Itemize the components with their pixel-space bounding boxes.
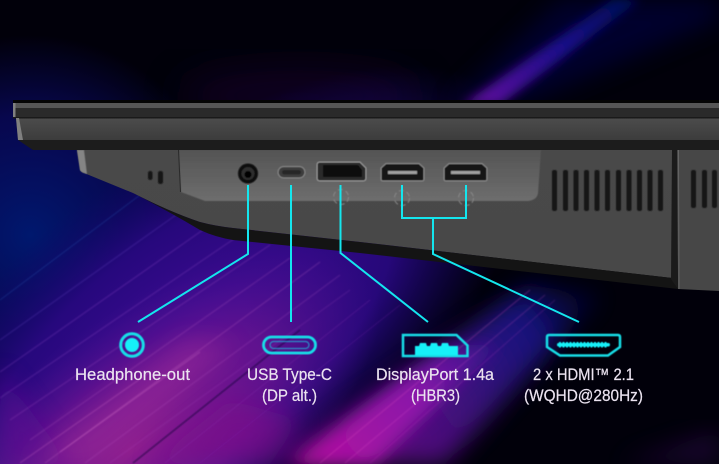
label: HDMI: (WQHD@280Hz) [524, 387, 643, 405]
line: headphone [138, 185, 248, 322]
bezel shadow band [18, 140, 719, 150]
label: USB Type-C [247, 366, 332, 405]
speaker slots [148, 171, 163, 184]
icon: HDMI [547, 335, 620, 356]
label: DisplayPort 1.4a: DisplayPort 1.4a [376, 366, 495, 384]
port panel left edge [178, 150, 180, 192]
label: DisplayPort 1.4a [376, 366, 495, 405]
ventilation slots [552, 170, 717, 211]
port panel [179, 150, 541, 201]
port: USB-C [278, 166, 305, 178]
line: HDMI bracket [402, 185, 466, 218]
chassis bottom dark strip [133, 193, 678, 289]
monitor body [13, 100, 719, 291]
label: HDMI: 2 x HDMI™ 2.1 [533, 366, 634, 384]
icon: USB-C [264, 337, 316, 353]
bezel top band [13, 103, 719, 108]
screw marks [334, 190, 474, 206]
port: HDMI 1 [381, 164, 424, 181]
chassis left highlight [77, 150, 87, 174]
port: HDMI 2 [444, 164, 487, 181]
label: USB Type-C: USB Type-C [247, 366, 332, 384]
port: DisplayPort [317, 162, 366, 181]
line: USB-C [290, 185, 292, 322]
line: DisplayPort [340, 185, 428, 322]
label: Headphone-out: Headphone-out [75, 366, 190, 384]
vertical seam [671, 150, 678, 289]
monitor lower chassis [77, 150, 677, 278]
icon: headphone [121, 334, 143, 356]
label: DisplayPort 1.4a: (HBR3) [411, 387, 460, 405]
icon: DisplayPort [403, 335, 468, 356]
port: headphone jack [238, 164, 258, 184]
line: HDMI [433, 218, 579, 322]
bezel lower band [16, 118, 719, 140]
label: USB Type-C: (DP alt.) [262, 387, 317, 405]
connector lines [138, 185, 579, 322]
label: HDMI [524, 366, 643, 405]
monitor right section [676, 150, 719, 291]
